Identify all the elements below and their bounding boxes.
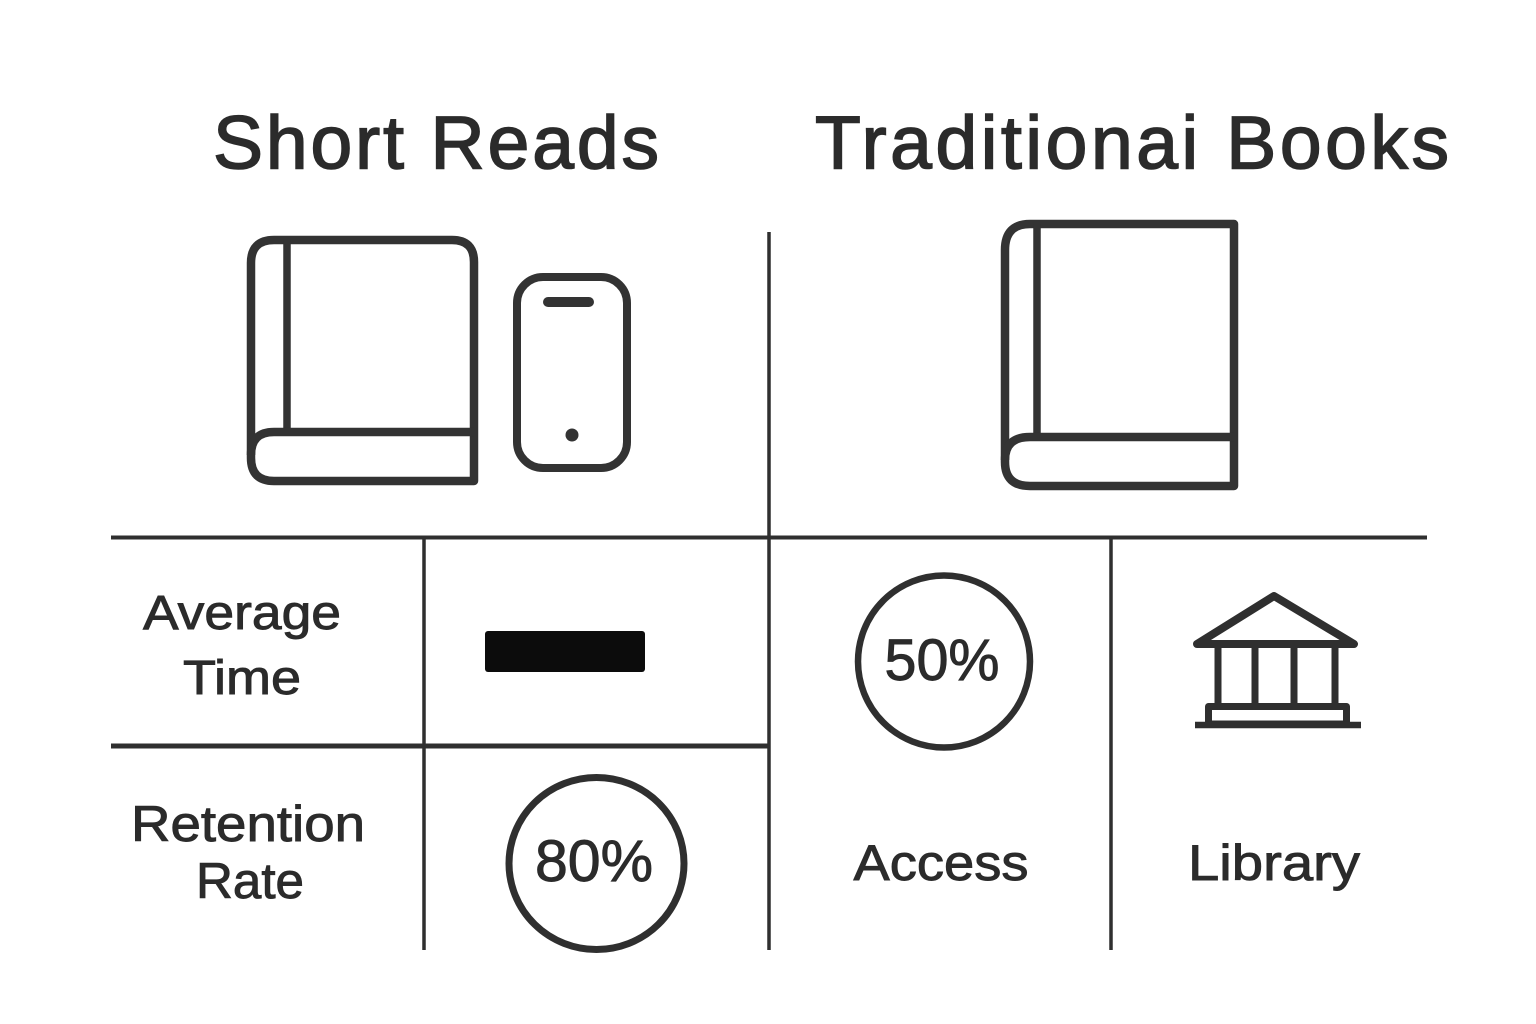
icon: library building [1195,596,1361,725]
heading: Traditional Books: Traditionai Books [815,100,1449,184]
black bar [485,631,645,672]
icon: short book [251,240,474,481]
label: Access: Access [854,835,1028,891]
label: Retention Rate: Retention [131,796,365,852]
icon: phone [517,277,627,468]
heading: Short Reads: Short Reads [213,100,659,184]
label: Retention Rate [131,796,365,909]
badge: 50% [858,576,1030,748]
label: Average Time: Average [143,587,341,640]
badge: 50%: 50% [884,628,1000,693]
label: Library: Library [1188,835,1360,891]
label: Average Time [143,587,341,705]
badge: 80% [509,778,684,950]
icon: traditional book [1005,224,1234,486]
label: Retention Rate: Rate [196,853,304,909]
badge: 80%: 80% [535,829,653,894]
label: Average Time: Time [183,652,301,705]
